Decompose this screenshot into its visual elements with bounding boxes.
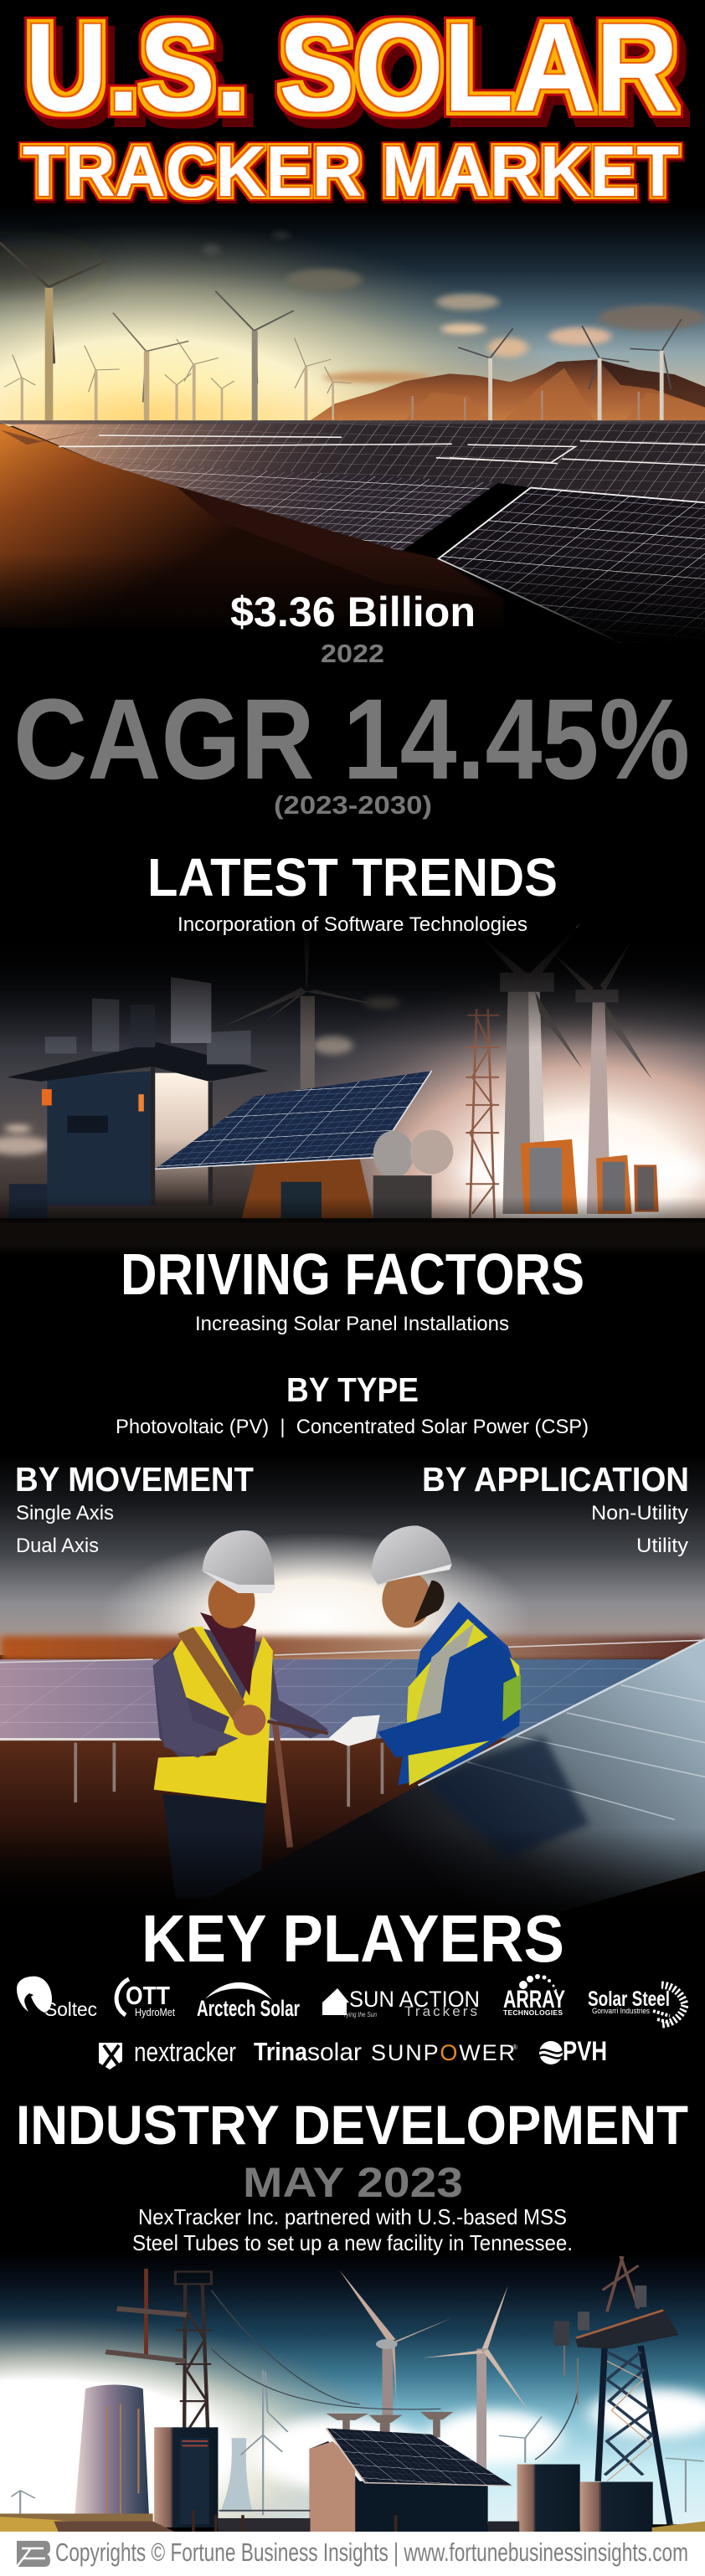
- left engineer: [153, 1530, 328, 1899]
- logo: PVH: [539, 2036, 607, 2066]
- logo: Solar Steel: Gonvarri Industries: [592, 2007, 650, 2015]
- substation building: [7, 977, 269, 1218]
- logo: nextracker: nextracker: [134, 2037, 236, 2067]
- development date: MAY 2023: [243, 2159, 463, 2206]
- logo: Array Technologies: [503, 1974, 565, 2017]
- movement option: dual axis: Dual Axis: [16, 1535, 99, 1557]
- substation solar panel: [155, 1071, 453, 1222]
- logo: SunPower: SUNPOWER: [371, 2040, 515, 2065]
- logo: PVH: PVH: [563, 2036, 607, 2066]
- left tower: [105, 2269, 211, 2429]
- logo: Trina Solar: Trinasolar: [254, 2037, 362, 2066]
- application option: utility: Utility: [636, 1535, 688, 1557]
- photo: solar panel, substation and wind turbines: [0, 923, 705, 1257]
- heading: by application: BY APPLICATION: [422, 1460, 689, 1499]
- right cabinets: [517, 2465, 653, 2532]
- logo: nextracker: [99, 2037, 236, 2070]
- logo: Soltec: Soltec: [44, 1998, 97, 2020]
- driving factors text: Increasing Solar Panel Installations: [195, 1313, 509, 1335]
- by movement column: [15, 1460, 254, 1557]
- heading: latest trends: LATEST TRENDS: [147, 847, 558, 908]
- company logos: [17, 1974, 685, 2070]
- logo: Arctech Solar: [197, 1982, 300, 2021]
- development description: [132, 2204, 573, 2255]
- logo: Array Technologies: ARRAY: [503, 1986, 565, 2013]
- icon: Fortune Business Insights logo: [17, 2541, 50, 2567]
- footer bar: [0, 2532, 705, 2576]
- heading: driving factors: DRIVING FACTORS: [121, 1242, 584, 1307]
- large turbines: [481, 923, 652, 1214]
- near solar panel array: [96, 461, 498, 551]
- logo: OTT HydroMet: HydroMet: [135, 2006, 175, 2018]
- small turbines: [11, 2370, 703, 2515]
- logo: Solar Steel: Solar Steel: [588, 1987, 670, 2011]
- by application column: [422, 1460, 689, 1557]
- main turbines: [339, 2270, 528, 2472]
- title line 2: TRACKER MARKET: [23, 132, 679, 212]
- development description: Steel Tubes to set up a new facility in Tennessee.: [132, 2230, 573, 2255]
- logo: OTT HydroMet: [116, 1979, 175, 2018]
- logo: SunPower: ®: [512, 2044, 517, 2051]
- logo: Arctech Solar: Arctech Solar: [197, 1996, 300, 2021]
- power lines: [211, 2291, 578, 2460]
- lattice tower: [466, 1009, 499, 1218]
- forecast period: (2023-2030): [274, 790, 432, 820]
- market size value: $3.36 Billion: [230, 589, 476, 635]
- heading: by movement: BY MOVEMENT: [15, 1460, 254, 1499]
- orange cabinets: [521, 1139, 659, 1214]
- development description: NexTracker Inc. partnered with U.S.-based MSS: [138, 2204, 567, 2229]
- photo: wind turbines and solar farm at sunset: [0, 206, 705, 658]
- logo: Solar Steel: [588, 1985, 685, 2024]
- ground: [0, 2511, 705, 2532]
- logo: Sun Action Trackers: [322, 1987, 480, 2019]
- photo: two engineers at a solar farm: [0, 1454, 705, 1935]
- solar roof hut: [309, 2428, 512, 2532]
- heading: key players: KEY PLAYERS: [142, 1901, 564, 1976]
- movement option: single axis: Single Axis: [16, 1502, 114, 1525]
- logo: OTT HydroMet: OTT: [126, 1981, 170, 2010]
- logo: Sun Action Trackers: Tying the Sun: [343, 2011, 377, 2018]
- by type options: Photovoltaic (PV) | Concentrated Solar Power (CSP): [116, 1416, 589, 1438]
- right engineer: [328, 1525, 521, 1786]
- logo: Sun Action Trackers: Trackers: [404, 2003, 477, 2019]
- far panels: [0, 420, 705, 505]
- application option: non-utility: Non-Utility: [591, 1502, 688, 1525]
- foreground solar panel: [180, 1639, 705, 1931]
- ground: [0, 422, 503, 628]
- latest trends text: Incorporation of Software Technologies: [178, 913, 527, 936]
- insulator platforms: [326, 2412, 453, 2438]
- logo: Array Technologies: TECHNOLOGIES: [503, 2008, 563, 2017]
- heading: by type: BY TYPE: [286, 1370, 419, 1409]
- photo: substation, turbines and solar roof under blue sky: [0, 2253, 705, 2532]
- cooling tower: [220, 2438, 253, 2512]
- base year: 2022: [321, 639, 384, 668]
- logo: Soltec: [17, 1977, 97, 2020]
- far turbine: [224, 932, 396, 1094]
- logo: Sun Action Trackers: SUN ACTION: [349, 1987, 480, 2012]
- storage tank: [75, 2385, 149, 2522]
- left cabinet: [154, 2427, 218, 2527]
- title: [23, 0, 679, 212]
- foreground solar panel array: [439, 488, 705, 643]
- large lattice pylon: [554, 2256, 679, 2524]
